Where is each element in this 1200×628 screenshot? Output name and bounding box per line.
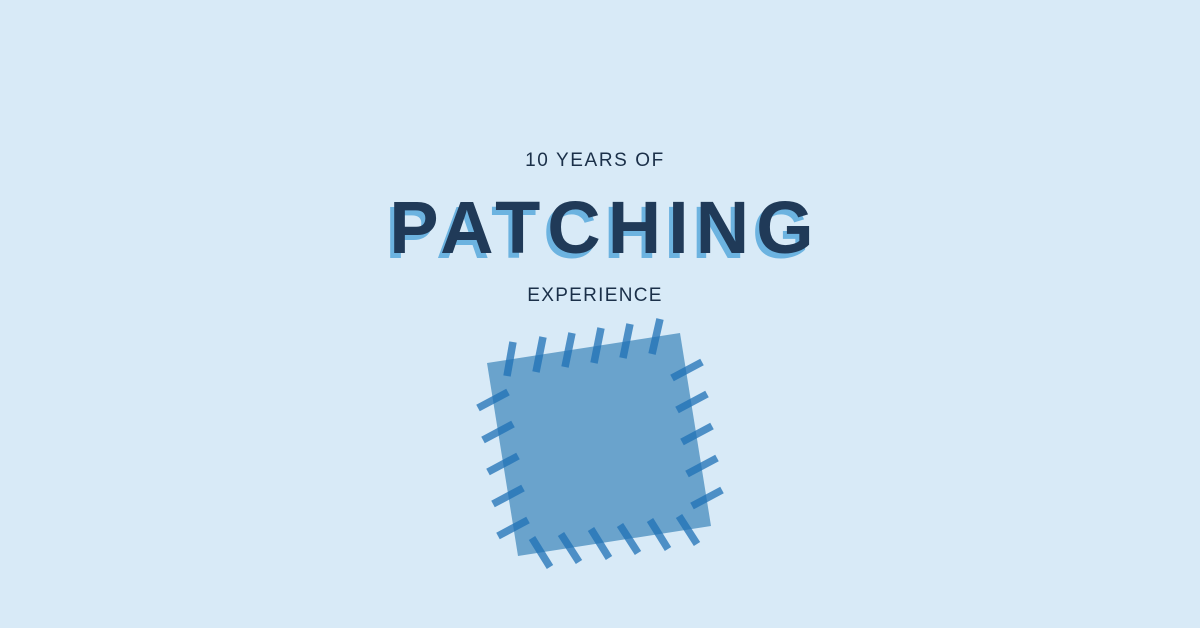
title: PATCHING: PATCHING — [385, 191, 817, 274]
subtitle bottom: EXPERIENCE — [527, 285, 663, 306]
subtitle top: 10 YEARS OF — [525, 150, 665, 171]
title: PATCHING: PATCHING — [389, 186, 821, 269]
